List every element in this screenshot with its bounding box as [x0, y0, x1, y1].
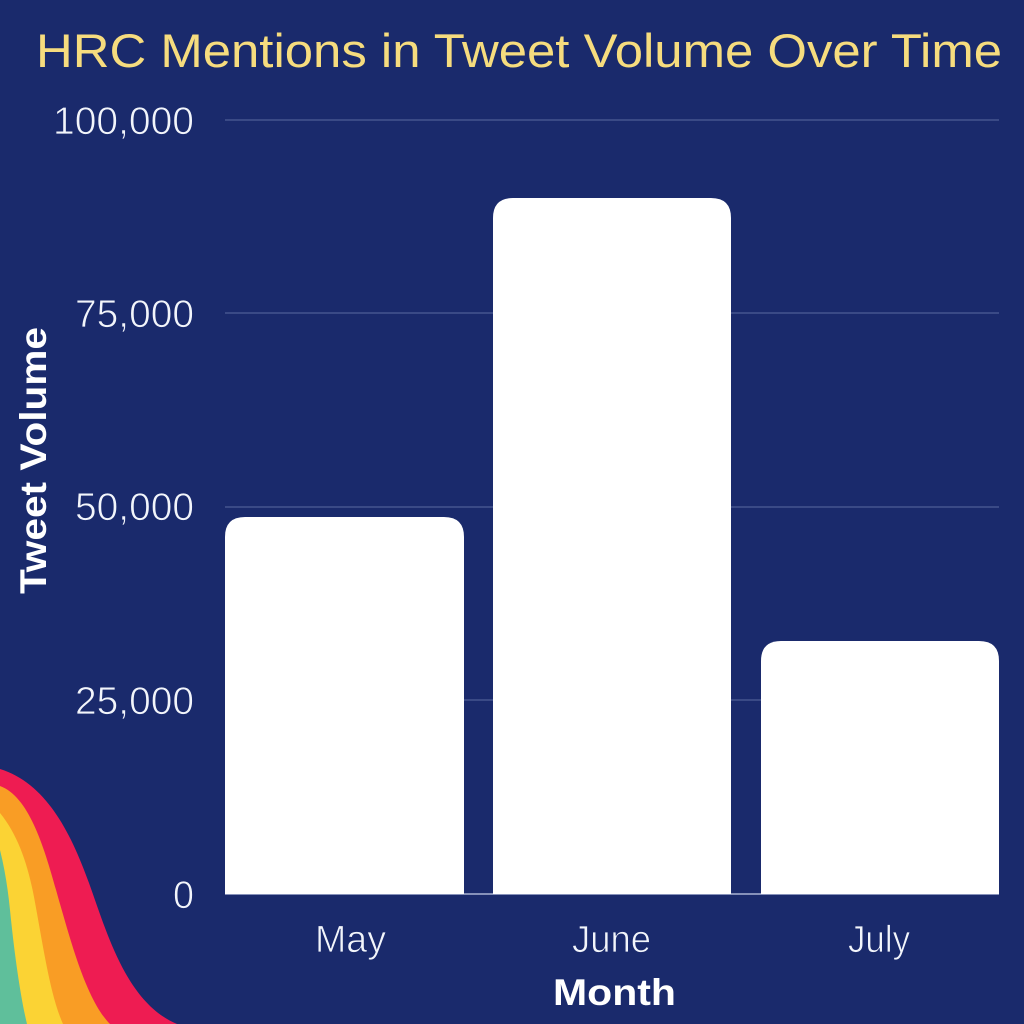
x-axis month labels	[315, 919, 910, 961]
title: HRC Mentions in Tweet Volume Over Time	[36, 24, 1002, 77]
y-axis tick labels: 50,000	[75, 486, 194, 529]
y-axis title: Tweet Volume	[13, 327, 54, 594]
decoration: rainbow wave	[0, 769, 177, 1024]
x-axis month labels: May	[315, 919, 386, 961]
x-axis month labels: June	[572, 919, 651, 961]
y-axis tick labels: 75,000	[75, 293, 194, 336]
bar: July	[761, 641, 999, 894]
y-axis tick labels: 25,000	[75, 680, 194, 723]
bar: June	[493, 198, 731, 894]
y-axis tick labels	[53, 100, 194, 917]
y-axis tick labels: 100,000	[53, 100, 194, 143]
bar: May	[225, 517, 464, 894]
y-axis tick labels: 0	[173, 874, 194, 917]
gridlines	[225, 120, 999, 894]
x-axis title: Month	[553, 972, 676, 1013]
x-axis month labels: July	[848, 919, 910, 961]
